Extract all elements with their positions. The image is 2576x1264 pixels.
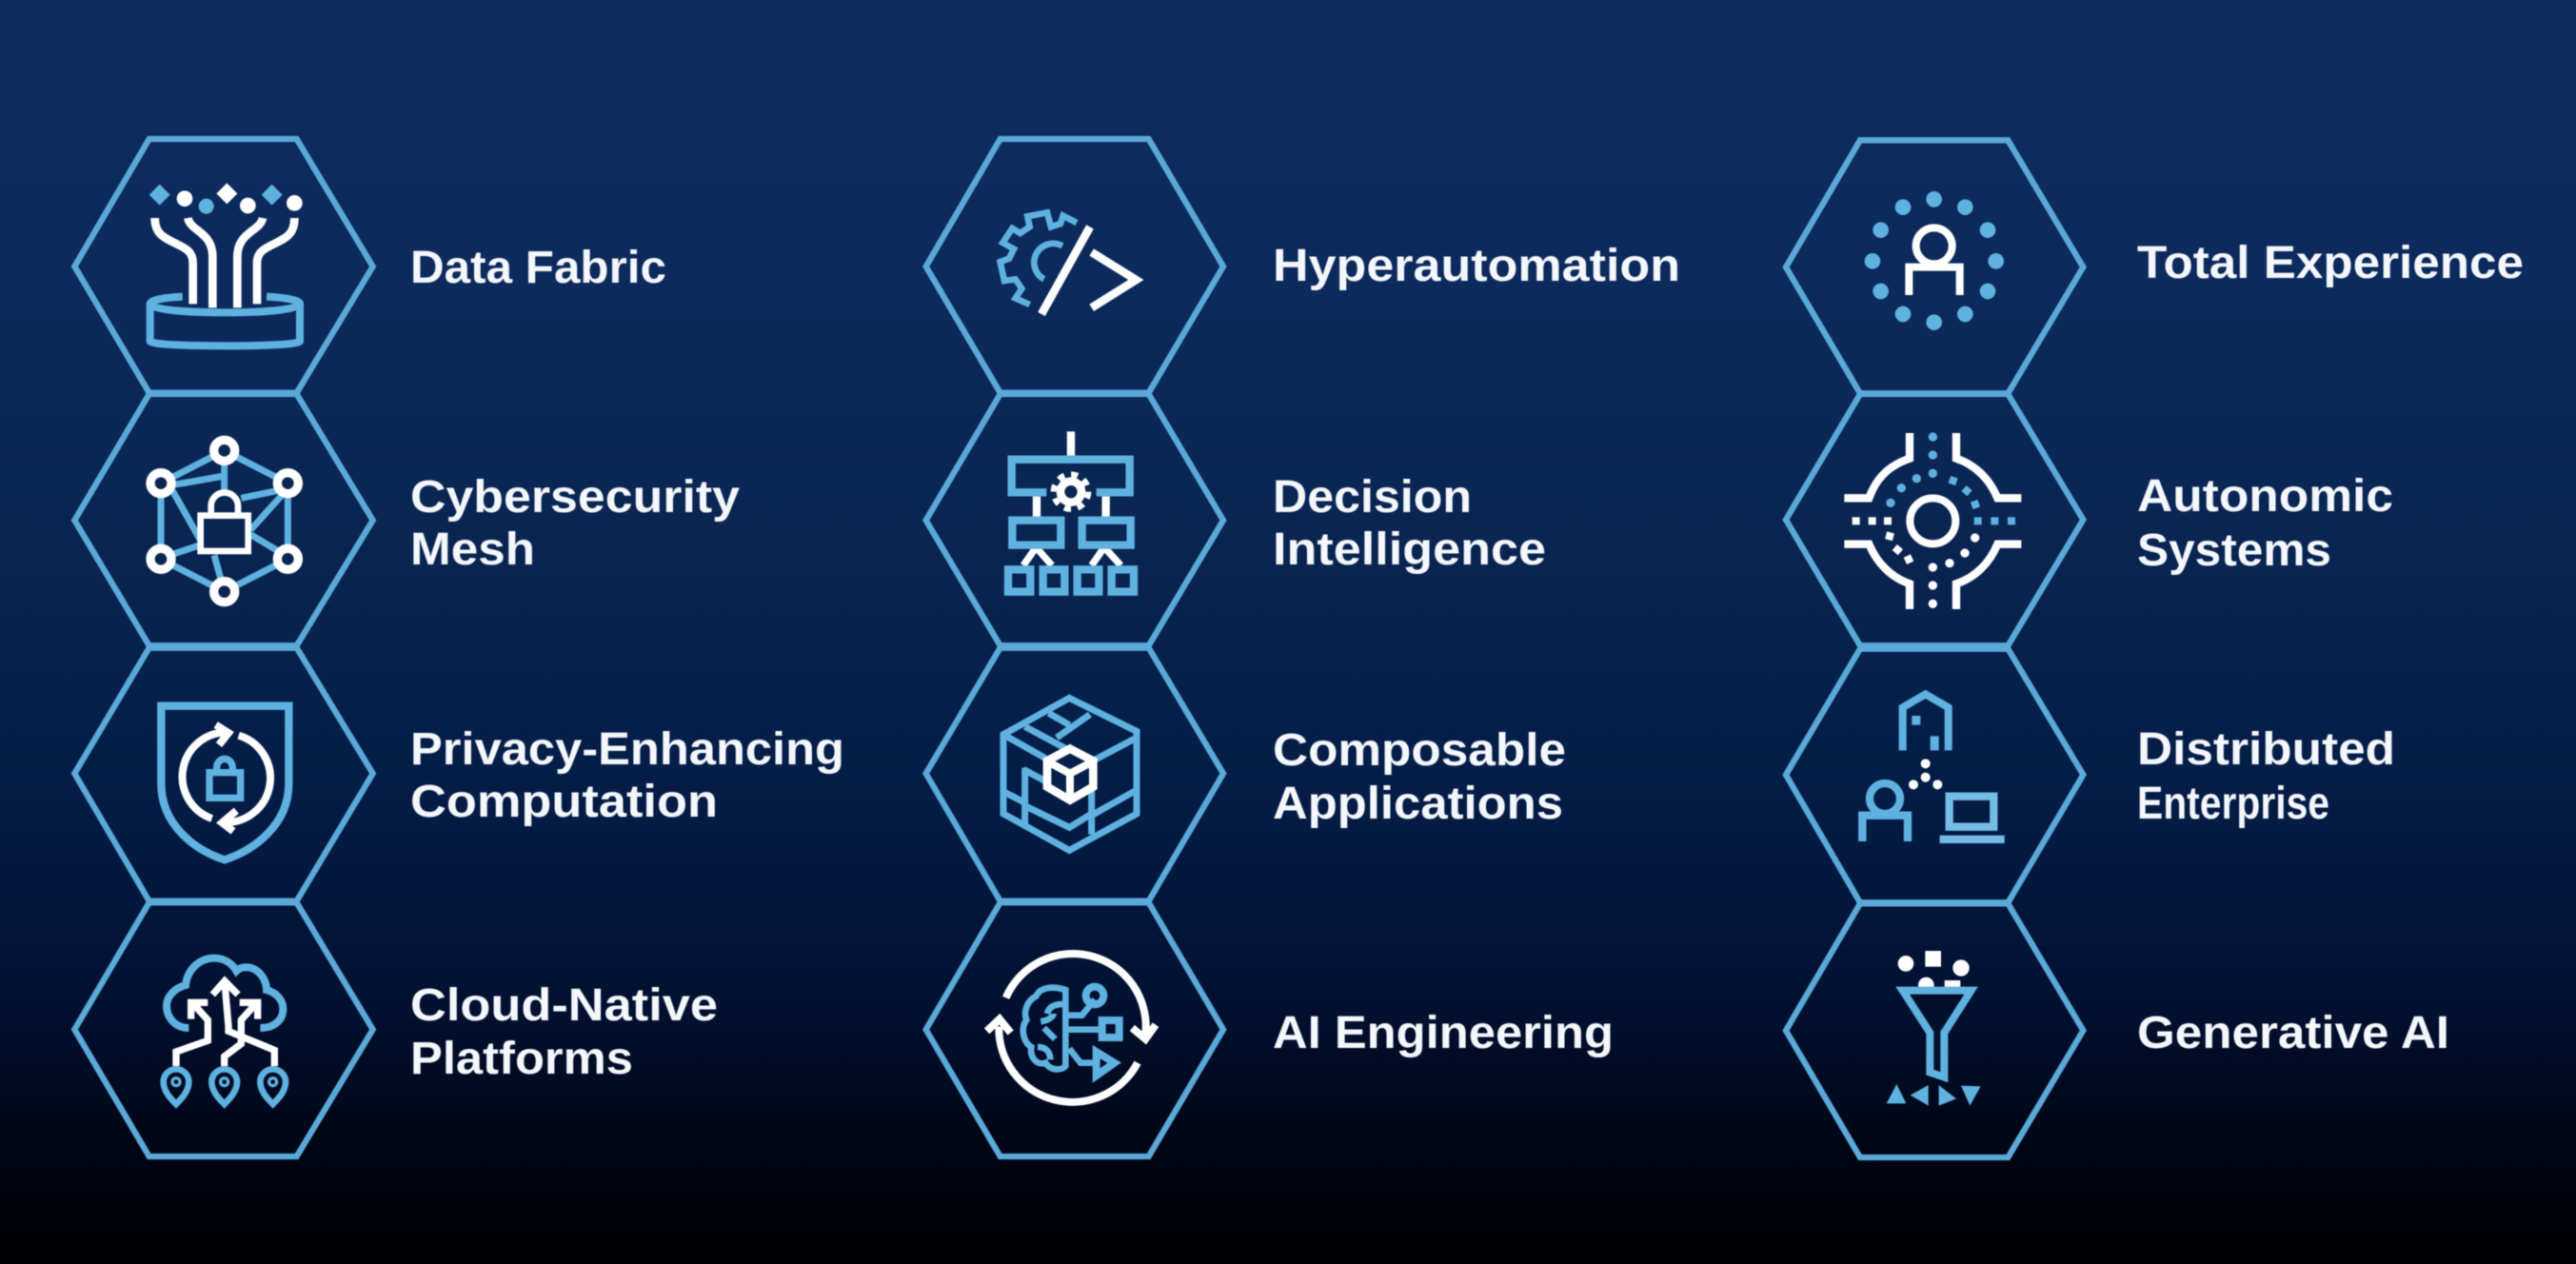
label: AI Engineering: AI Engineering [1273,1008,1614,1058]
label: Generative AI: Generative AI [2137,1008,2449,1058]
label: Cloud-Native Platforms: Cloud-Native [410,980,718,1031]
panel: Distributed Enterprise [1786,649,2395,902]
hexagon and icon: decision tree with gear [926,394,1223,645]
label: Cybersecurity Mesh: Cybersecurity [410,472,740,523]
panel: AI Engineering [926,902,1614,1156]
panel: Distributed Enterprise: Enterprise [2137,779,2329,829]
label: Decision Intelligence: Decision [1273,472,1472,523]
label: Autonomic Systems: Autonomic [2137,471,2393,522]
panel: Composable Applications [926,648,1566,901]
panel: Cloud-Native Platforms [74,902,718,1156]
label: Data Fabric: Data Fabric [410,243,666,293]
panel: Composable Applications: Applications [1273,779,1563,829]
panel: Autonomic Systems [1786,394,2393,645]
hexagon and icon: building, person and laptop [1786,649,2083,902]
hexagon and icon: person in ring of dots [1786,140,2083,393]
panel: Autonomic Systems: Systems [2137,525,2331,576]
hexagon and icon: brain with cycle arrows [926,902,1223,1156]
label: Hyperautomation: Hyperautomation [1273,241,1680,291]
hexagon and icon: funnel with shapes [1786,903,2083,1157]
panel: Decision Intelligence [926,394,1546,645]
label: Privacy-Enhancing Computation: Privacy-Enhancing [410,724,844,775]
panel: Data Fabric [74,139,666,393]
panel: Cloud-Native Platforms: Platforms [410,1034,633,1084]
label: Total Experience: Total Experience [2137,238,2524,288]
panel: Cybersecurity Mesh [74,394,740,645]
hexagon and icon: gear and code slash [926,139,1223,393]
hexagon and icon: data fabric [74,139,373,393]
grid of twelve trends [74,139,2524,1157]
panel: Hyperautomation [926,139,1680,393]
hexagon and icon: composable cube [926,648,1223,901]
hexagon and icon: shield with lock [74,648,373,901]
panel: Cybersecurity Mesh: Mesh [410,524,535,575]
hexagon and icon: roundabout [1786,394,2083,645]
panel: Decision Intelligence: Intelligence [1273,524,1546,575]
panel: Privacy-Enhancing Computation [74,648,844,901]
panel: Total Experience [1786,140,2524,393]
panel: Generative AI [1786,903,2449,1157]
hexagon and icon: cloud with arrows and pins [74,902,373,1156]
label: Distributed Enterprise: Distributed [2137,724,2395,775]
label: Composable Applications: Composable [1273,725,1566,776]
panel: Privacy-Enhancing Computation: Computation [410,777,718,827]
hexagon and icon: mesh with lock [74,394,373,645]
